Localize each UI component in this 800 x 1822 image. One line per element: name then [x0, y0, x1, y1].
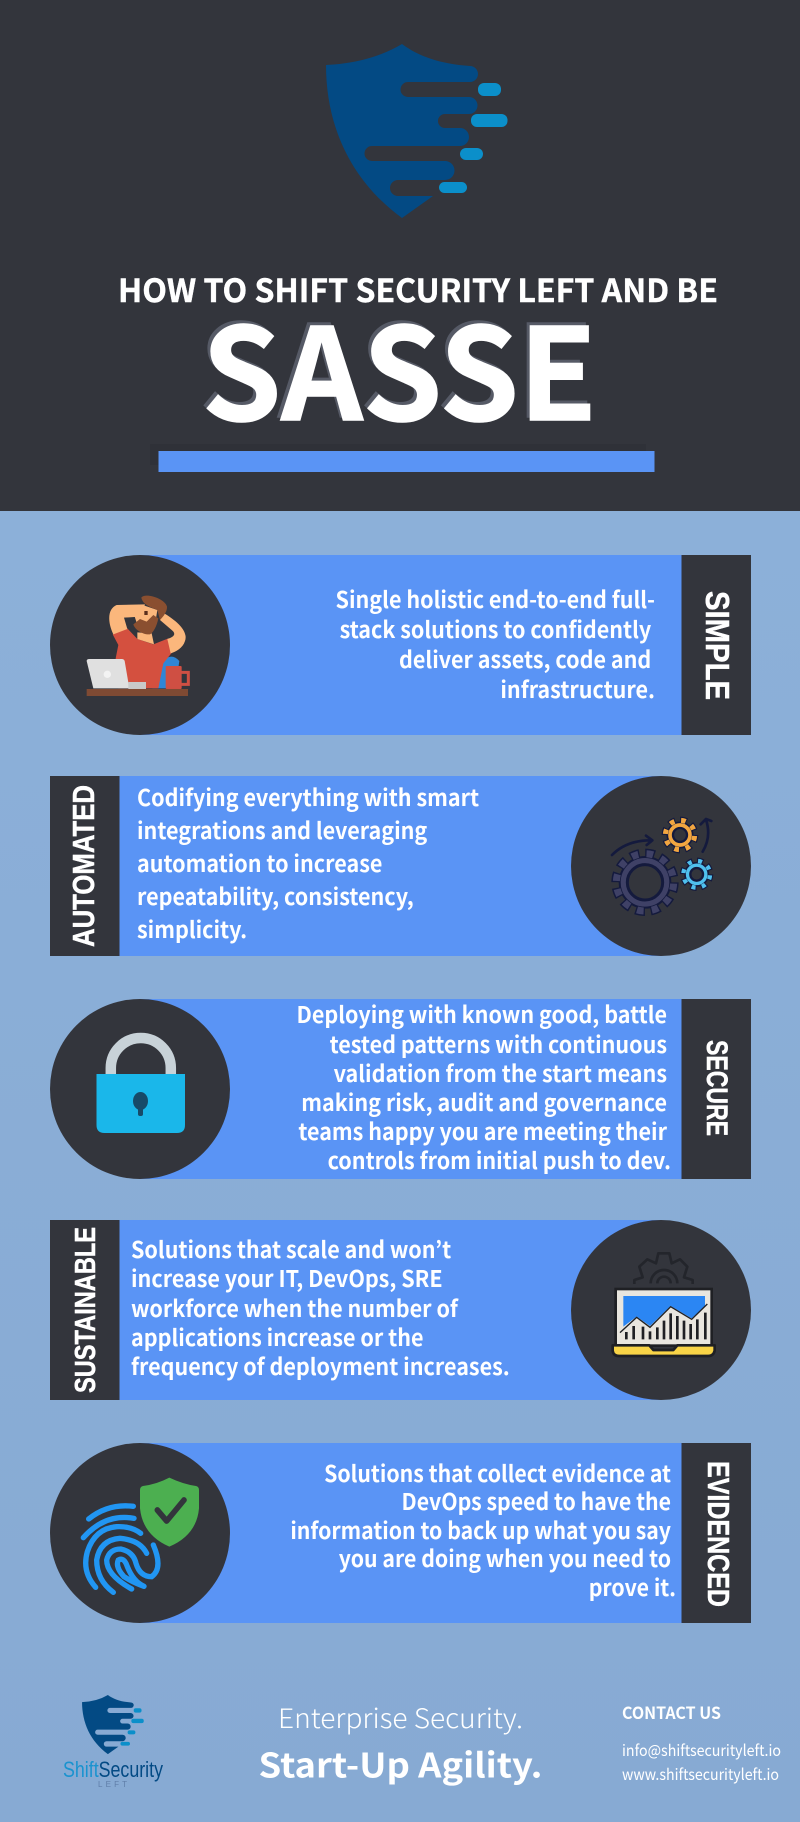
icon: shield logo: [326, 44, 508, 218]
text: sustainable description: workforce when the number of: [131, 1291, 459, 1324]
text: evidenced description: prove it.: [589, 1570, 676, 1603]
title underline bar: [150, 444, 654, 472]
text: automated description: Codifying everything with smart: [137, 780, 479, 813]
label: sustainable: SUSTAINABLE: [70, 1227, 102, 1393]
panel: automated: [50, 776, 751, 956]
title: SASSE: SASSE: [199, 270, 594, 454]
text: secure description: teams happy you are meeting their: [298, 1114, 667, 1147]
text: sustainable description: applications increase or the: [131, 1320, 424, 1353]
label: secure: SECURE: [700, 1040, 733, 1136]
text: secure description: Deploying with known good, battle: [297, 997, 667, 1030]
text: sustainable description: frequency of deployment increases.: [131, 1349, 510, 1382]
panel: secure: [50, 997, 751, 1179]
contact details: info@shiftsecurityleft.io: [622, 1739, 781, 1761]
icon: gears: [612, 819, 711, 911]
icon: padlock: [96, 1038, 185, 1133]
text: secure description: tested patterns with continuous: [330, 1027, 667, 1060]
panel: sustainable: [50, 1220, 751, 1400]
text: simple description: infrastructure.: [500, 672, 655, 705]
panel: simple: [50, 555, 751, 735]
text: secure description: validation from the start means: [334, 1056, 667, 1089]
logo subtitle: LEFT: [98, 1780, 127, 1789]
icon: man at laptop: [87, 596, 188, 696]
text: sustainable description: Solutions that scale and won’t: [131, 1232, 451, 1265]
text: sustainable description: [131, 1232, 510, 1382]
text: simple description: [336, 582, 655, 705]
text: secure description: making risk, audit and governance: [301, 1085, 667, 1118]
contact details: www.shiftsecurityleft.io: [622, 1763, 779, 1785]
text: evidenced description: [290, 1456, 676, 1603]
text: automated description: automation to increase: [137, 846, 382, 879]
label: simple: SIMPLE: [699, 591, 736, 700]
panel: evidenced: [50, 1443, 751, 1623]
label: automated: AUTOMATED: [67, 785, 101, 947]
text: evidenced description: information to back up what you say: [290, 1513, 671, 1546]
text: secure description: controls from initial push to dev.: [328, 1143, 671, 1176]
text: simple description: Single holistic end-to-end full-: [336, 582, 655, 615]
icon: laptop with chart: [613, 1253, 715, 1356]
tagline: Enterprise Security.: [278, 1697, 523, 1736]
text: evidenced description: you are doing when you need to: [339, 1541, 671, 1574]
text: automated description: repeatability, consistency,: [137, 879, 414, 912]
footer logo: [63, 1695, 163, 1789]
text: automated description: [137, 780, 479, 945]
text: sustainable description: increase your IT, DevOps, SRE: [131, 1261, 443, 1294]
text: evidenced description: Solutions that collect evidence at: [324, 1456, 671, 1489]
label: evidenced: EVIDENCED: [701, 1461, 735, 1607]
text: simple description: deliver assets, code and: [399, 642, 651, 675]
text: automated description: integrations and leveraging: [137, 813, 427, 846]
heading: how to shift security left and be: HOW TO SHIFT SECURITY LEFT AND BE: [118, 266, 718, 312]
text: automated description: simplicity.: [137, 912, 247, 945]
contact details: [622, 1700, 781, 1785]
text: secure description: [297, 997, 671, 1176]
icon: footer shield: [82, 1695, 144, 1754]
header band: [0, 0, 800, 511]
tagline: Start-Up Agility.: [258, 1738, 542, 1788]
text: simple description: stack solutions to confidently: [340, 612, 651, 645]
logo wordmark: ShiftSecurity: [63, 1757, 163, 1782]
contact details: CONTACT US: [622, 1700, 721, 1724]
tagline: [258, 1697, 542, 1788]
title: SASSE: SASSE: [202, 273, 597, 457]
text: evidenced description: DevOps speed to have the: [402, 1484, 671, 1517]
icon: fingerprint and shield: [83, 1478, 199, 1592]
